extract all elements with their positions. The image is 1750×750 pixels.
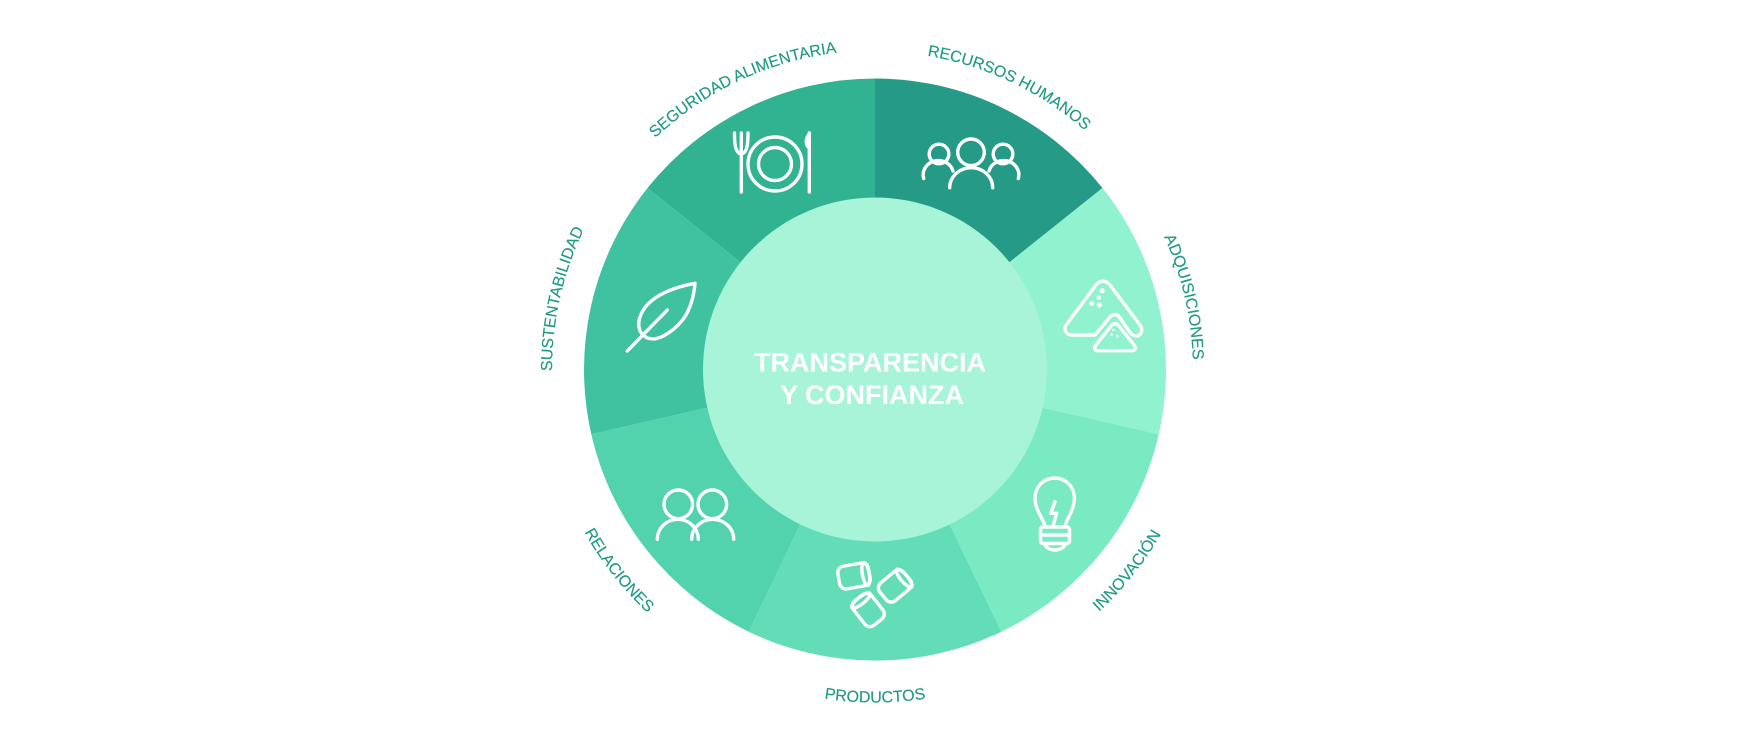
icon: leaf: [627, 283, 695, 351]
sector: recursos humanos: [875, 78, 1102, 370]
label: innovación: INNOVACIÓN: [1092, 529, 1161, 611]
sector: productos: [749, 370, 1001, 661]
icon: salt piles: [1065, 281, 1142, 351]
label: adquisiciones: ADQUISICIONES: [1164, 236, 1204, 359]
label: seguridad alimentaria: SEGURIDAD ALIMENTARIA: [650, 42, 837, 136]
icon: marshmallows: [837, 562, 914, 629]
icon: plate and cutlery: [734, 133, 809, 192]
sector: seguridad alimentaria: [648, 78, 875, 370]
label: productos: PRODUCTOS: [826, 688, 925, 703]
icon: people group: [923, 139, 1019, 188]
center title: Y CONFIANZA: [780, 380, 964, 410]
sector: innovación: [875, 370, 1159, 632]
center title: [754, 348, 986, 410]
circular diagram: [584, 78, 1166, 661]
label: sustentabilidad: SUSTENTABILIDAD: [540, 227, 582, 370]
label: recursos humanos: RECURSOS HUMANOS: [928, 45, 1090, 129]
center circle: [703, 198, 1047, 542]
center title: TRANSPARENCIA: [754, 348, 986, 378]
sector: sustentabilidad: [584, 188, 875, 434]
icon: light bulb: [1035, 478, 1074, 550]
label: relaciones: RELACIONES: [585, 528, 654, 612]
icon: two people: [657, 490, 734, 539]
sector: relaciones: [591, 370, 875, 632]
sector: adquisiciones: [875, 188, 1166, 434]
